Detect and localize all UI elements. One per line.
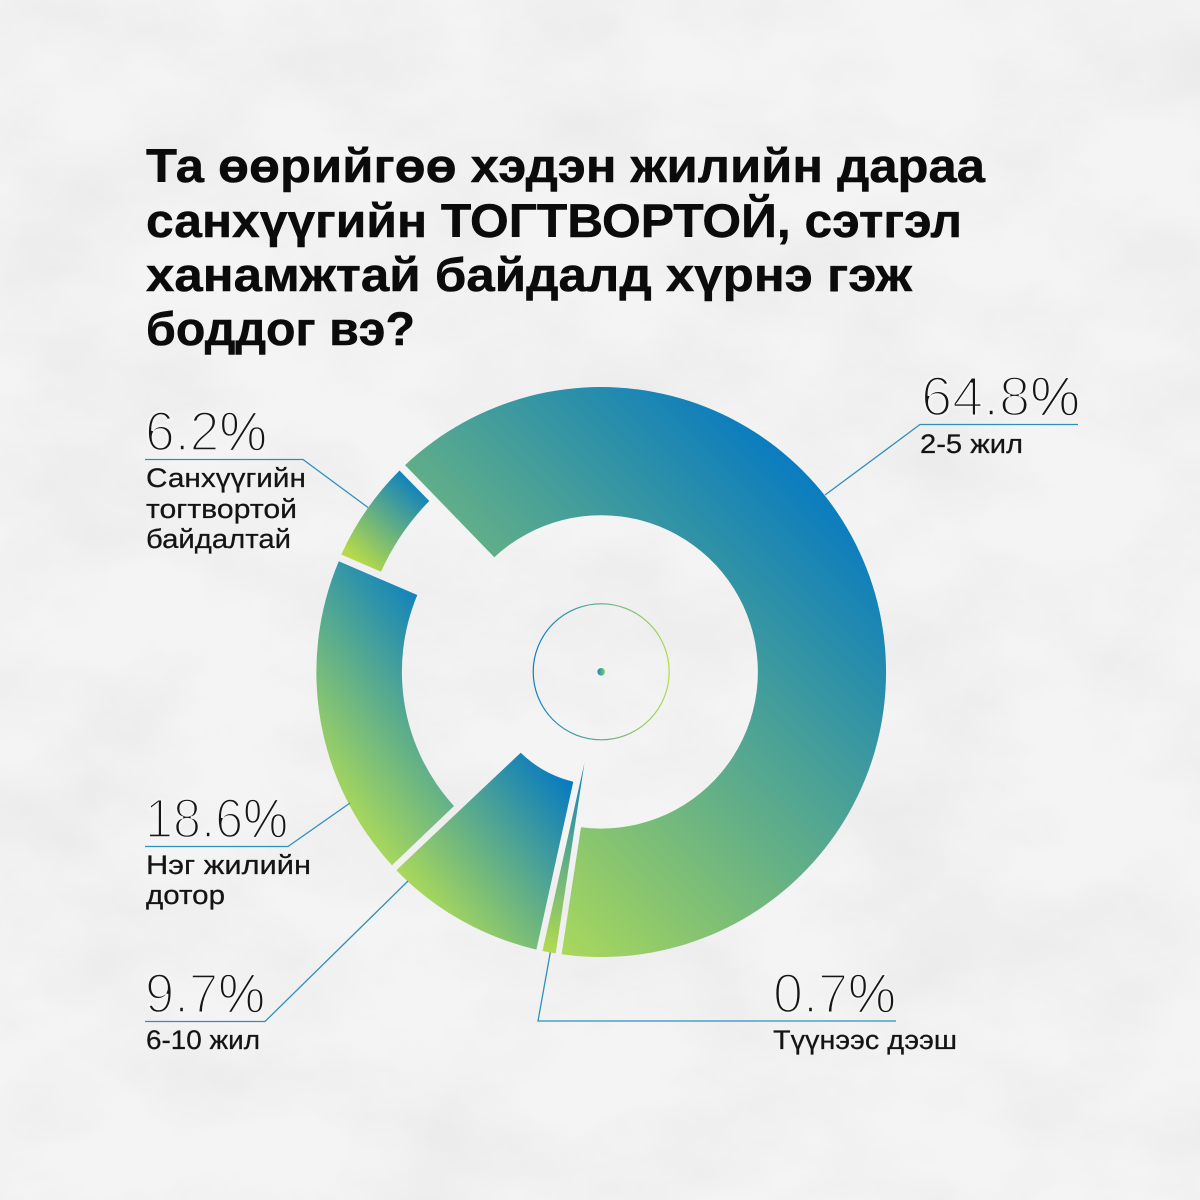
slice: 64.8% 2-5 жил <box>405 387 886 957</box>
center ring <box>533 604 669 740</box>
callout: 6.2%: байдалтай <box>146 524 291 554</box>
callout: 18.6%: 18.6% <box>145 786 288 850</box>
slice: 6.2% Санхүүгийн тогтвортой байдалтай <box>341 470 429 572</box>
callout: 64.8% <box>825 364 1080 495</box>
callout: 18.6%: Нэг жилийн <box>146 850 311 880</box>
slice: 0.7% Түүнээс дээш <box>542 763 584 953</box>
callout: 0.7%: Түүнээс дээш <box>773 1025 957 1055</box>
leader line: 0.7% through slice <box>538 943 896 1021</box>
callout: 18.6%: дотор <box>146 880 225 910</box>
slice: 18.6% Нэг жилийн дотор <box>316 561 454 865</box>
title: ханамжтай байдалд хүрнэ гэж <box>146 249 913 302</box>
callout: 6.2%: 6.2% <box>145 400 267 462</box>
title: боддог вэ? <box>146 303 415 356</box>
callout: 64.8%: 2-5 жил <box>920 429 1023 459</box>
callout: 6.2%: тогтвортой <box>146 494 297 524</box>
callout: 6.2%: Санхүүгийн <box>146 463 306 493</box>
callout: 18.6% <box>145 786 350 910</box>
callout: 9.7%: 9.7% <box>145 962 265 1024</box>
title: Та өөрийгөө хэдэн жилийн дараа <box>146 140 986 193</box>
callout: 9.7% <box>145 881 408 1055</box>
slice: 9.7% 6-10 жил <box>396 753 573 950</box>
callout: 9.7%: 6-10 жил <box>146 1025 260 1055</box>
callout: 6.2% <box>145 400 368 554</box>
title: санхүүгийн ТОГТВОРТОЙ, сэтгэл <box>146 193 962 248</box>
callout: 0.7% <box>773 962 957 1055</box>
callout: 64.8%: 64.8% <box>921 364 1080 428</box>
center dot <box>597 668 605 676</box>
donut chart <box>316 387 896 1021</box>
callout: 0.7%: 0.7% <box>773 962 896 1024</box>
title <box>146 140 986 356</box>
